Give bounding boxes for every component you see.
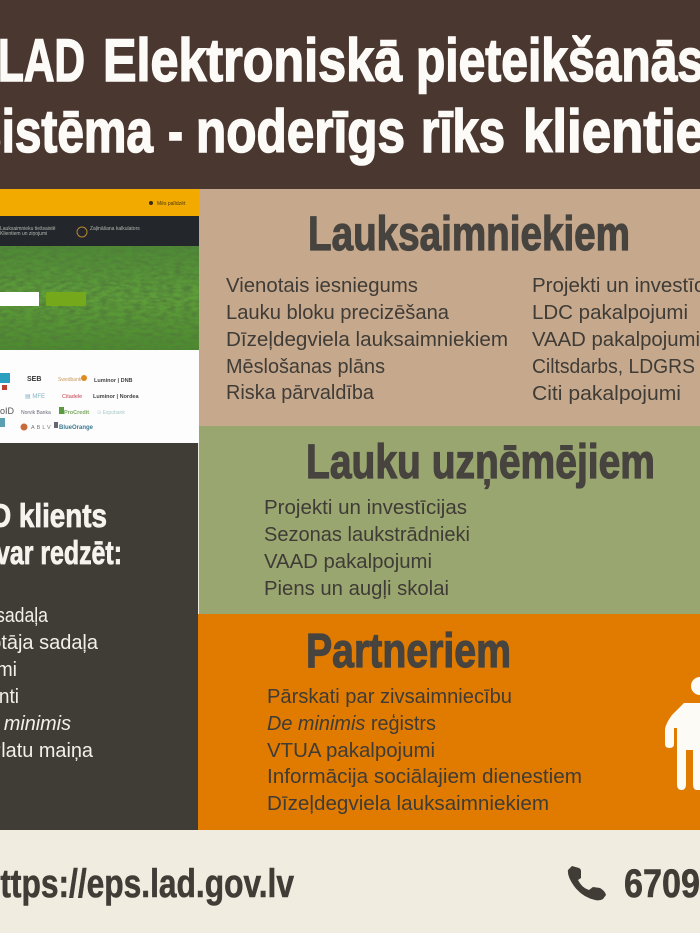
list: rural entrepreneurs: Sezonas laukstrādnieki	[264, 523, 470, 546]
panel: Partneriem	[198, 614, 700, 830]
website screenshot: Luminor | DNB	[94, 378, 133, 384]
panel: Lauksaimniekiem	[199, 189, 700, 426]
website screenshot: Zaļināšana kalkulators	[90, 226, 140, 232]
website screenshot: Mēs palīdzēt	[157, 201, 186, 207]
list: rural entrepreneurs: VAAD pakalpojumi	[264, 550, 432, 573]
header band	[0, 0, 700, 189]
list: left column	[226, 274, 508, 404]
website screenshot: BlueOrange	[59, 425, 94, 431]
website screenshot: oID	[0, 406, 15, 416]
title: noderīgs	[196, 98, 405, 165]
list: partners: Informācija sociālajiem dienestiem	[267, 765, 582, 788]
list: right column: Citi pakalpojumi	[532, 382, 681, 405]
list: partners: VTUA pakalpojumi	[267, 739, 435, 762]
list: left column: Dīzeļdegviela lauksaimniekiem	[226, 328, 508, 351]
list: right column: VAAD pakalpojumi	[532, 328, 700, 351]
website screenshot: SEB	[27, 376, 41, 383]
heading: Lauksaimniekiem: Lauksaimniekiem	[308, 208, 630, 261]
title: Elektroniskā	[103, 27, 403, 94]
list: rural entrepreneurs: Projekti un investīcijas	[264, 496, 467, 519]
list: rural entrepreneurs: Piens un augļi skolai	[264, 577, 449, 600]
list: right column: Ciltsdarbs, LDGRS	[532, 355, 695, 378]
website screenshot: Lauksaimnieku tiešsaistē	[0, 226, 56, 232]
website screenshot: Citadele	[62, 394, 82, 400]
title: LAD	[0, 27, 85, 94]
website screenshot: ⊙ Expobank	[97, 410, 125, 416]
website screenshot: ▤ MFE	[25, 394, 45, 400]
icon: phone	[568, 866, 606, 900]
footer band	[0, 830, 700, 933]
list: right column: LDC pakalpojumi	[532, 301, 688, 324]
title	[0, 27, 700, 165]
website screenshot: ProCredit	[64, 410, 89, 416]
heading: Partneriem: Partneriem	[306, 625, 511, 678]
list: left column: Lauku bloku precizēšana	[226, 301, 450, 324]
list: left column: Riska pārvaldība	[226, 381, 375, 404]
sidebar heading	[0, 497, 122, 571]
list: partners: Pārskati par zivsaimniecību	[267, 685, 512, 708]
website screenshot: Swedbank	[58, 377, 82, 383]
website screenshot	[0, 189, 199, 443]
icon: person	[665, 677, 700, 790]
website screenshot: ABLV	[31, 425, 53, 431]
sidebar list	[0, 604, 99, 762]
list: partners: Dīzeļdegviela lauksaimniekiem	[267, 792, 549, 815]
list: rural entrepreneurs	[264, 496, 470, 600]
list: partners: De minimis reģistrs	[267, 712, 436, 735]
title: -	[168, 98, 183, 165]
list: left column: Mēslošanas plāns	[226, 355, 385, 378]
sidebar heading: var redzēt:	[0, 534, 122, 571]
panel: client sidebar	[0, 443, 198, 830]
list: left column: Vienotais iesniegums	[226, 274, 418, 297]
panel: Lauku uzņēmējiem	[199, 426, 700, 614]
website screenshot: Luminor | Nordea	[93, 394, 139, 400]
list: partners	[267, 685, 582, 815]
title: rīks	[421, 98, 505, 165]
list: right column	[532, 274, 700, 405]
website screenshot: Norvik Banka	[21, 410, 51, 416]
website screenshot: Klientiem un ziņojumi	[0, 231, 47, 237]
